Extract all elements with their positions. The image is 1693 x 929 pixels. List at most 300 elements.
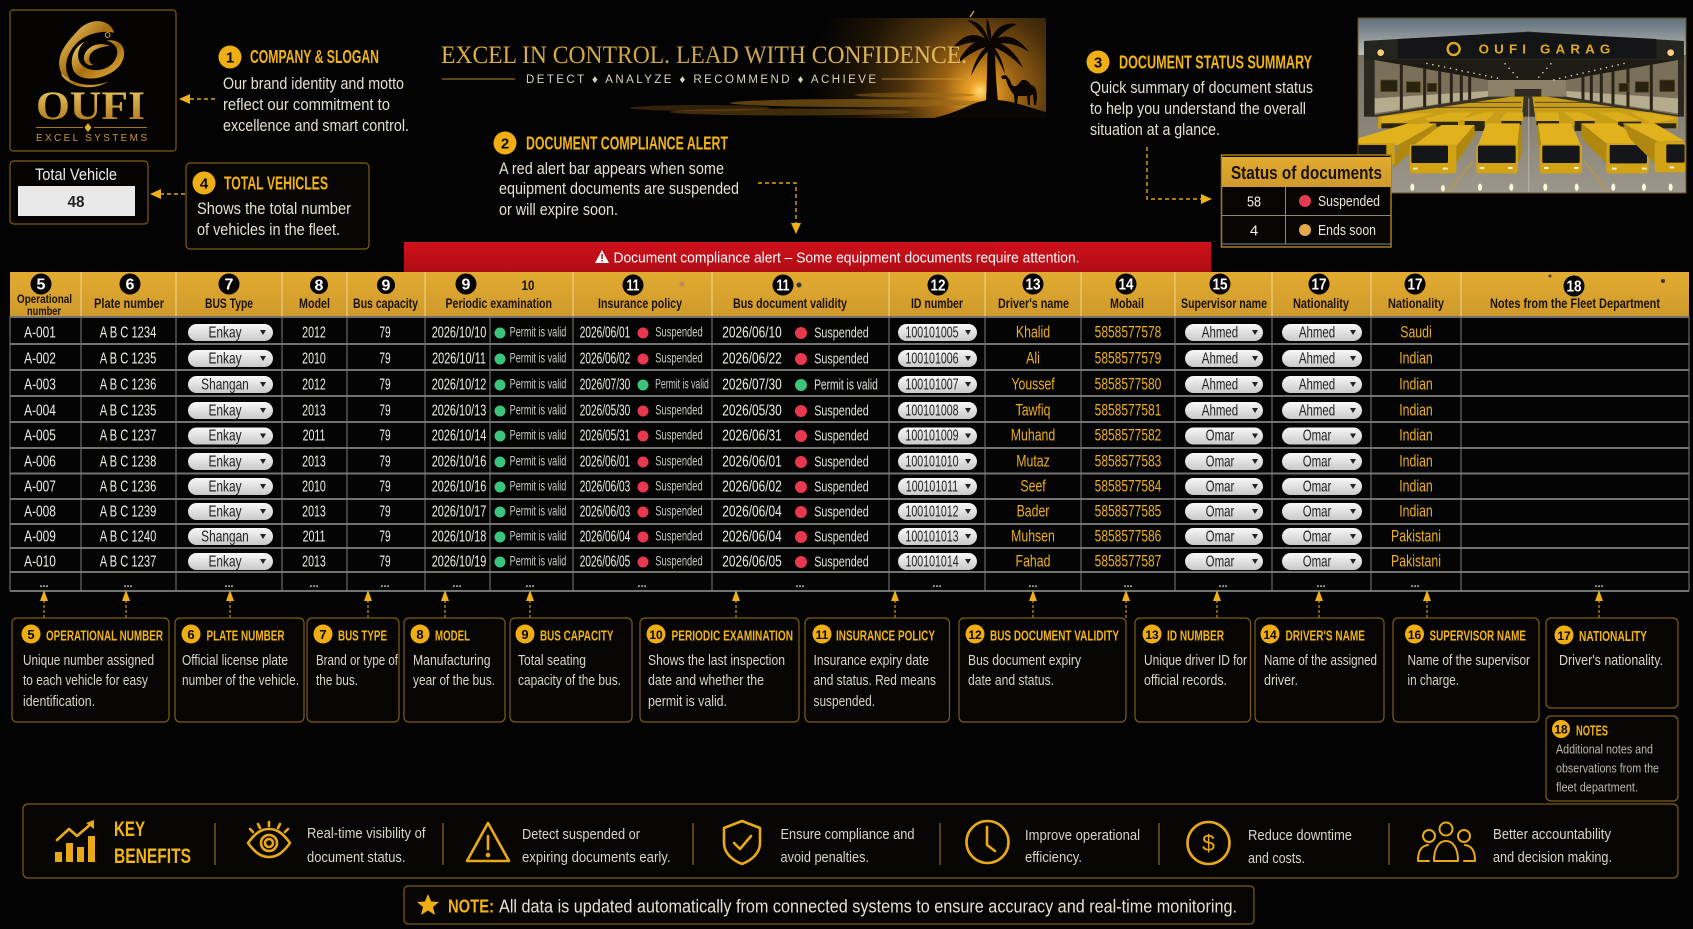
- column: insurance policy status: Suspended: [655, 326, 703, 340]
- icon: growth chart: [55, 820, 95, 862]
- total vehicle widget: [10, 161, 148, 224]
- column: mobile: 5858577580: [1095, 376, 1161, 394]
- card: plate number: [175, 618, 304, 722]
- section 2: document compliance alert: [494, 132, 739, 219]
- logo panel: EXCEL SYSTEMS: [36, 133, 147, 144]
- column: periodic examination dates: 2026/10/13: [432, 402, 486, 419]
- column: insurance policy status: Suspended: [655, 555, 703, 569]
- column: operational number: A-004: [24, 401, 56, 419]
- column: model: 2013: [302, 453, 326, 470]
- card: plate number: Official license plate: [182, 653, 288, 669]
- column: supervisor name dropdowns: Omar: [1206, 528, 1235, 545]
- row of ellipses: ...: [39, 578, 49, 590]
- column: model: 2012: [302, 376, 326, 393]
- column: ID number dropdowns: 100101011: [906, 478, 958, 495]
- benefit: detect documents: Detect suspended or: [522, 826, 640, 843]
- row of ellipses: ...: [1028, 578, 1038, 590]
- benefit: accountability: Better accountability: [1493, 826, 1611, 843]
- column: periodic examination dates: 2026/10/16: [432, 453, 486, 470]
- column: driver's name: Khalid: [1016, 324, 1050, 342]
- column: nationality: Indian: [1399, 503, 1433, 521]
- status of documents table: 4: [1250, 222, 1258, 240]
- column: bus document dates: 2026/06/31: [722, 426, 782, 444]
- row of ellipses: ...: [380, 578, 390, 590]
- column: insurance policy dates: 2026/06/03: [580, 502, 630, 520]
- benefit: operational efficiency: Improve operational: [1025, 827, 1140, 844]
- column: driver's name: Tawfiq: [1016, 402, 1050, 420]
- column: insurance policy dates: 2026/06/02: [580, 349, 630, 367]
- benefit: real-time visibility: document status.: [307, 849, 406, 866]
- table header labels: number: [27, 306, 61, 318]
- column: bus type dropdowns: Shangan: [201, 375, 249, 393]
- column: bus type dropdowns: [188, 323, 273, 570]
- total vehicle widget: Total Vehicle: [35, 166, 117, 184]
- column: periodic examination status: Permit is valid: [510, 530, 566, 544]
- column: operational number: A-009: [24, 527, 56, 545]
- column: ID number dropdowns: 100101005: [905, 324, 959, 341]
- column: nationality dropdowns: Ahmed: [1299, 376, 1335, 393]
- benefit: compliance: [724, 821, 914, 866]
- column: periodic examination status: Permit is valid: [510, 505, 566, 519]
- table header labels: Nationality: [1388, 296, 1444, 311]
- table header number badges: 9: [382, 278, 391, 294]
- benefit: compliance: avoid penalties.: [780, 849, 869, 866]
- column: mobile: 5858577587: [1095, 553, 1161, 571]
- banner: slogan with palm and camel: DETECT ♦ ANALYZE ♦ RECOMMEND ♦ ACHIEVE: [526, 74, 876, 86]
- column: nationality dropdowns: Omar: [1303, 553, 1332, 570]
- card: supervisor name: [1393, 618, 1539, 722]
- table header labels: Bus document validity: [733, 296, 847, 311]
- note bar: All data is updated automatically from connected systems to ensure accuracy and real-time monitoring.: [499, 896, 1237, 916]
- table header labels: Bus capacity: [353, 296, 418, 311]
- column: periodic examination dates: 2026/10/14: [432, 427, 487, 444]
- table header number badges: 14: [1118, 276, 1134, 294]
- column: plate number: [100, 324, 157, 570]
- card: supervisor name: in charge.: [1408, 673, 1459, 689]
- column: insurance policy status: Suspended: [655, 352, 703, 366]
- card: insurance policy: 11: [816, 628, 829, 642]
- column: driver's name: Youssef: [1011, 376, 1055, 394]
- column: bus type dropdowns: Enkay: [208, 552, 242, 570]
- card: ID number: ID NUMBER: [1167, 628, 1224, 644]
- column: periodic examination status: Permit is valid: [510, 378, 566, 392]
- column: nationality dropdowns: Omar: [1303, 528, 1332, 545]
- column: ID number dropdowns: 100101013: [905, 528, 959, 545]
- banner: slogan with palm and camel: [441, 11, 1046, 118]
- column: ID number dropdowns: 100101010: [905, 453, 959, 470]
- column: bus capacity: 79: [379, 552, 391, 570]
- section 1: company and slogan: COMPANY & SLOGAN: [250, 47, 379, 67]
- section 3: document status summary: situation at a glance.: [1090, 121, 1220, 139]
- column: operational number: [24, 323, 56, 570]
- section 4: total vehicles: TOTAL VEHICLES: [224, 174, 328, 194]
- column: nationality: Indian: [1399, 350, 1433, 368]
- card: model: [404, 618, 505, 722]
- status of documents table: [1222, 155, 1391, 247]
- column: insurance policy dates: 2026/06/03: [580, 477, 630, 495]
- table header number badges: 11: [626, 278, 640, 294]
- card: periodic examination: 10: [649, 628, 663, 642]
- benefit: accountability: [1418, 822, 1612, 866]
- card: plate number: 6: [187, 627, 195, 642]
- column: bus document status: [795, 324, 878, 570]
- table header number badges: 6: [126, 276, 135, 294]
- column: periodic examination status: Permit is valid: [510, 404, 566, 418]
- icon: shield check: [724, 821, 760, 864]
- column: insurance policy dates: 2026/06/01: [580, 323, 630, 341]
- card: bus document validity: BUS DOCUMENT VALIDITY: [990, 628, 1119, 644]
- card: nationality: [1546, 618, 1678, 708]
- card: driver's name: Name of the assigned: [1264, 653, 1377, 669]
- card: bus document validity: 12: [968, 628, 982, 642]
- column: periodic examination dates: 2026/10/10: [432, 324, 486, 341]
- row of ellipses: ...: [1218, 578, 1228, 590]
- column: bus document dates: 2026/06/05: [722, 552, 782, 570]
- column: periodic examination status: Permit is valid: [510, 352, 566, 366]
- table header number badges: 15: [1212, 276, 1228, 294]
- card: bus capacity: BUS CAPACITY: [540, 628, 614, 644]
- column: bus type dropdowns: Enkay: [208, 477, 242, 495]
- column: bus document dates: 2026/06/02: [722, 477, 782, 495]
- benefit: detect documents: [467, 823, 670, 866]
- column: driver's name: Seef: [1020, 478, 1046, 496]
- column: plate number: A B C 1236: [100, 376, 156, 393]
- column: bus document dates: 2026/05/30: [722, 401, 782, 419]
- column: driver's name: Muhsen: [1011, 528, 1055, 546]
- banner: slogan with palm and camel: EXCEL IN CONTROL. LEAD WITH CONFIDENCE.: [441, 40, 967, 69]
- column: model: 2013: [302, 402, 326, 419]
- alert bar: [404, 242, 1211, 272]
- total vehicle widget: 48: [68, 194, 85, 211]
- column: insurance policy status: Suspended: [655, 480, 703, 494]
- card: notes: fleet department.: [1556, 780, 1638, 794]
- column: bus document status: Suspended: [814, 402, 869, 419]
- section 2: document compliance alert: equipment documents are suspended: [499, 180, 739, 198]
- benefit: reduce downtime: and costs.: [1248, 850, 1305, 867]
- card: operational number: [12, 618, 169, 722]
- column: plate number: A B C 1235: [100, 402, 156, 419]
- column: bus type dropdowns: Enkay: [208, 401, 242, 419]
- column: model: 2011: [303, 528, 325, 545]
- table header number badges: [30, 274, 1665, 296]
- column: operational number: A-003: [24, 375, 56, 393]
- section 2: document compliance alert: 2: [501, 136, 509, 152]
- column: supervisor name dropdowns: Omar: [1206, 478, 1235, 495]
- card: bus document validity: [959, 618, 1126, 722]
- column: operational number: A-002: [24, 349, 56, 367]
- icon: people: [1418, 822, 1475, 861]
- column: mobile: 5858577585: [1095, 503, 1161, 521]
- card: periodic examination: [640, 618, 799, 722]
- icon: warning triangle: [595, 250, 609, 263]
- icon: warning: [467, 823, 509, 861]
- column: insurance policy status: Suspended: [655, 505, 703, 519]
- arrow: status summary to table: [1147, 147, 1212, 204]
- column: bus document status: Suspended: [814, 453, 869, 470]
- card: insurance policy: Insurance expiry date: [814, 653, 929, 669]
- card: ID number: [1135, 618, 1250, 722]
- column: driver's name: Fahad: [1016, 553, 1050, 571]
- column: driver's name: Muhand: [1011, 427, 1055, 445]
- column: insurance policy status: Suspended: [655, 404, 703, 418]
- icon: star: [417, 894, 439, 915]
- column: model: 2010: [302, 478, 326, 495]
- column: bus capacity: [379, 323, 391, 570]
- section 4: total vehicles: Shows the total number: [197, 200, 351, 218]
- section 1: company and slogan: [218, 46, 409, 135]
- card: operational number: 5: [27, 627, 35, 642]
- column: nationality dropdowns: [1282, 324, 1362, 570]
- card: notes: NOTES: [1576, 724, 1608, 740]
- column: insurance policy dates: 2026/07/30: [580, 375, 630, 393]
- card: insurance policy: suspended.: [814, 694, 875, 710]
- section 1: company and slogan: Our brand identity and motto: [223, 75, 404, 93]
- table header number badges: 10: [522, 277, 535, 293]
- column: nationality: Pakistani: [1391, 553, 1441, 571]
- card: bus type: [307, 618, 399, 722]
- card: bus document validity: Bus document expiry: [968, 653, 1082, 669]
- section 4: total vehicles: of vehicles in the fleet.: [197, 221, 340, 239]
- column: driver's name: [1011, 324, 1055, 571]
- column: periodic examination dates: 2026/10/17: [432, 503, 486, 520]
- table header labels: ID number: [911, 296, 964, 311]
- row of ellipses: ...: [1594, 578, 1604, 590]
- column: supervisor name dropdowns: Ahmed: [1202, 350, 1238, 367]
- column: mobile: 5858577579: [1095, 350, 1161, 368]
- column: periodic examination status: [494, 326, 566, 569]
- table header number badges: 17: [1408, 276, 1423, 294]
- column: bus document status: Suspended: [814, 478, 869, 495]
- section 1: company and slogan: reflect our commitment to: [223, 96, 390, 114]
- section 2: document compliance alert: A red alert bar appears when some: [499, 160, 724, 178]
- table header number badges: 17: [1312, 276, 1327, 294]
- column: insurance policy dates: 2026/06/01: [580, 452, 630, 470]
- column: model: 2010: [302, 350, 326, 367]
- column: bus type dropdowns: Enkay: [208, 452, 242, 470]
- card: bus type: 7: [319, 627, 327, 642]
- column: insurance policy dates: 2026/06/04: [580, 527, 630, 545]
- column: bus document dates: 2026/07/30: [722, 375, 782, 393]
- column: bus document status: Suspended: [814, 427, 869, 444]
- card: periodic examination: permit is valid.: [648, 694, 727, 710]
- front row buses: [1358, 123, 1685, 173]
- column: plate number: A B C 1237: [100, 553, 156, 570]
- card: bus document validity: date and status.: [968, 673, 1054, 689]
- garage photo illustration: [1358, 18, 1686, 193]
- table header labels: Model: [299, 296, 330, 311]
- card: ID number: 13: [1145, 628, 1159, 642]
- card: periodic examination: date and whether the: [648, 673, 764, 689]
- card: operational number: identification.: [23, 694, 95, 710]
- arrow: logo callout: [179, 94, 215, 104]
- table header number badges: 9: [462, 276, 471, 294]
- table header number badges: 13: [1026, 276, 1041, 294]
- row of ellipses: ...: [309, 578, 319, 590]
- column: nationality dropdowns: Omar: [1303, 503, 1332, 520]
- column: plate number: A B C 1237: [100, 427, 156, 444]
- card: model: 8: [416, 627, 424, 642]
- arrow: total vehicle callout: [150, 189, 185, 199]
- column: operational number: A-006: [24, 452, 56, 470]
- column: nationality dropdowns: Ahmed: [1299, 350, 1335, 367]
- column: mobile: 5858577583: [1095, 453, 1161, 471]
- card: driver's name: driver.: [1264, 673, 1298, 689]
- column: model: 2013: [302, 503, 326, 520]
- column: ID number dropdowns: [898, 324, 977, 570]
- column: model: 2013: [302, 553, 326, 570]
- table header labels: Plate number: [94, 296, 165, 311]
- card: periodic examination: PERIODIC EXAMINATION: [672, 628, 793, 644]
- table header number badges: 11: [776, 278, 790, 294]
- column: model: 2011: [303, 427, 325, 444]
- column: nationality dropdowns: Omar: [1303, 478, 1332, 495]
- arrows from legend cards to table columns: [40, 590, 1603, 618]
- card: nationality: 17: [1557, 629, 1571, 643]
- logo panel: OUFI: [36, 83, 145, 128]
- column: insurance policy status: Suspended: [655, 429, 703, 443]
- table header number badges: 5: [37, 276, 46, 294]
- column: insurance policy dates: [580, 323, 630, 570]
- row of ellipses: ...: [1316, 578, 1326, 590]
- table header labels: Nationality: [1293, 296, 1349, 311]
- status of documents table: Status of documents: [1231, 163, 1382, 183]
- table header number badges: 7: [225, 276, 234, 294]
- column: ID number dropdowns: 100101012: [905, 503, 959, 520]
- benefit: real-time visibility: [248, 822, 426, 866]
- row of ellipses: ...: [1123, 578, 1133, 590]
- column: bus document dates: 2026/06/01: [722, 452, 782, 470]
- column: ID number dropdowns: 100101008: [905, 402, 959, 419]
- column: model: 2012: [302, 324, 326, 341]
- column: bus type dropdowns: Enkay: [208, 502, 242, 520]
- column: driver's name: Ali: [1026, 350, 1040, 368]
- column: bus capacity: 79: [379, 477, 391, 495]
- column: nationality: Indian: [1399, 427, 1433, 445]
- section 3: document status summary: DOCUMENT STATUS SUMMARY: [1119, 52, 1312, 72]
- key benefits heading: KEY: [114, 818, 145, 841]
- column: bus capacity: 79: [379, 527, 391, 545]
- column: mobile: 5858577586: [1095, 528, 1161, 546]
- card: operational number: Unique number assigned: [23, 653, 154, 669]
- column: operational number: A-001: [24, 323, 56, 341]
- table header labels: Periodic examination: [446, 296, 552, 311]
- benefit: operational efficiency: [966, 821, 1140, 866]
- column: mobile: 5858577582: [1095, 427, 1161, 445]
- column: operational number: A-010: [24, 552, 56, 570]
- column: model: [302, 324, 326, 570]
- row of ellipses: ...: [795, 578, 805, 590]
- row of ellipses: ...: [637, 578, 647, 590]
- column: driver's name: Mutaz: [1016, 453, 1050, 471]
- section 2: document compliance alert: DOCUMENT COMPLIANCE ALERT: [526, 134, 728, 154]
- table header labels: Insurance policy: [598, 296, 682, 311]
- column: bus document status: Permit is valid: [814, 376, 878, 393]
- column: periodic examination dates: 2026/10/11: [432, 350, 486, 367]
- column: bus capacity: 79: [379, 426, 391, 444]
- card: nationality: Driver's nationality.: [1559, 653, 1663, 669]
- status of documents table: 58: [1247, 194, 1261, 210]
- logo panel: [10, 10, 176, 151]
- card: operational number: to each vehicle for easy: [23, 673, 149, 689]
- icon: logo swirl: [59, 21, 124, 87]
- column: mobile: 5858577578: [1095, 324, 1161, 342]
- card: plate number: PLATE NUMBER: [206, 628, 285, 644]
- card: bus capacity: capacity of the bus.: [518, 673, 621, 689]
- card: driver's name: 14: [1263, 628, 1277, 642]
- column: nationality: Indian: [1399, 376, 1433, 394]
- table header labels: Supervisor name: [1181, 296, 1267, 311]
- column: supervisor name dropdowns: Omar: [1206, 553, 1235, 570]
- table header labels: Mobail: [1110, 296, 1144, 311]
- benefit: reduce downtime: Reduce downtime: [1248, 827, 1352, 844]
- benefit: detect documents: expiring documents early.: [522, 849, 670, 866]
- column: operational number: A-008: [24, 502, 56, 520]
- column: bus document dates: 2026/06/22: [722, 349, 782, 367]
- benefit: real-time visibility: Real-time visibility of: [307, 825, 426, 842]
- column: supervisor name dropdowns: Omar: [1206, 453, 1235, 470]
- card: driver's name: DRIVER'S NAME: [1286, 628, 1365, 644]
- column: insurance policy dates: 2026/05/30: [580, 401, 630, 419]
- status of documents table: Ends soon: [1318, 222, 1376, 239]
- column: periodic examination status: Permit is valid: [510, 455, 566, 469]
- card: notes: Additional notes and: [1556, 742, 1653, 756]
- section 3: document status summary: [1086, 50, 1313, 139]
- row of ellipses: ...: [525, 578, 535, 590]
- alert bar: Document compliance alert – Some equipment documents require attention.: [614, 250, 1080, 266]
- column: plate number: A B C 1234: [100, 324, 157, 341]
- column: supervisor name dropdowns: [1185, 324, 1263, 570]
- column: bus capacity: 79: [379, 323, 391, 341]
- column: bus document status: Suspended: [814, 350, 869, 367]
- section 3: document status summary: to help you understand the overall: [1090, 100, 1306, 118]
- column: nationality: Saudi: [1400, 324, 1432, 342]
- section 4: total vehicles: [186, 163, 369, 249]
- garage sign: OUFI GARAG: [1479, 42, 1610, 57]
- column: nationality dropdowns: Omar: [1303, 427, 1332, 444]
- column: periodic examination dates: 2026/10/12: [432, 376, 486, 393]
- column: operational number: A-007: [24, 477, 56, 495]
- column: insurance policy status: [638, 326, 709, 569]
- column: bus type dropdowns: Enkay: [208, 349, 242, 367]
- row of ellipses: ...: [452, 578, 462, 590]
- card: bus capacity: [510, 618, 632, 722]
- column: bus capacity: 79: [379, 401, 391, 419]
- column: bus type dropdowns: Enkay: [208, 426, 242, 444]
- icon: palm tree: [951, 18, 1029, 102]
- table header labels: BUS Type: [205, 296, 253, 311]
- section 3: document status summary: Quick summary of document status: [1090, 79, 1313, 97]
- column: nationality dropdowns: Ahmed: [1299, 402, 1335, 419]
- table header number badges: 12: [930, 278, 946, 294]
- table header labels: [17, 294, 1660, 318]
- column: driver's name: Bader: [1017, 503, 1049, 521]
- column: supervisor name dropdowns: Omar: [1206, 503, 1235, 520]
- icon: eye: [248, 822, 290, 857]
- card: plate number: number of the vehicle.: [182, 673, 299, 689]
- column: mobile: 5858577584: [1095, 478, 1161, 496]
- card: periodic examination: Shows the last inspection: [648, 653, 785, 669]
- row of ellipses: ...: [1410, 578, 1420, 590]
- column: plate number: A B C 1235: [100, 350, 156, 367]
- column: bus document status: Suspended: [814, 528, 869, 545]
- section 1: company and slogan: excellence and smart control.: [223, 117, 409, 135]
- status of documents table: Suspended: [1318, 193, 1380, 210]
- column: bus document dates: 2026/06/10: [722, 323, 782, 341]
- card: operational number: OPERATIONAL NUMBER: [46, 628, 163, 644]
- card: insurance policy: INSURANCE POLICY: [836, 628, 935, 644]
- column: nationality: Pakistani: [1391, 528, 1441, 546]
- icon: dollar: [1188, 822, 1230, 864]
